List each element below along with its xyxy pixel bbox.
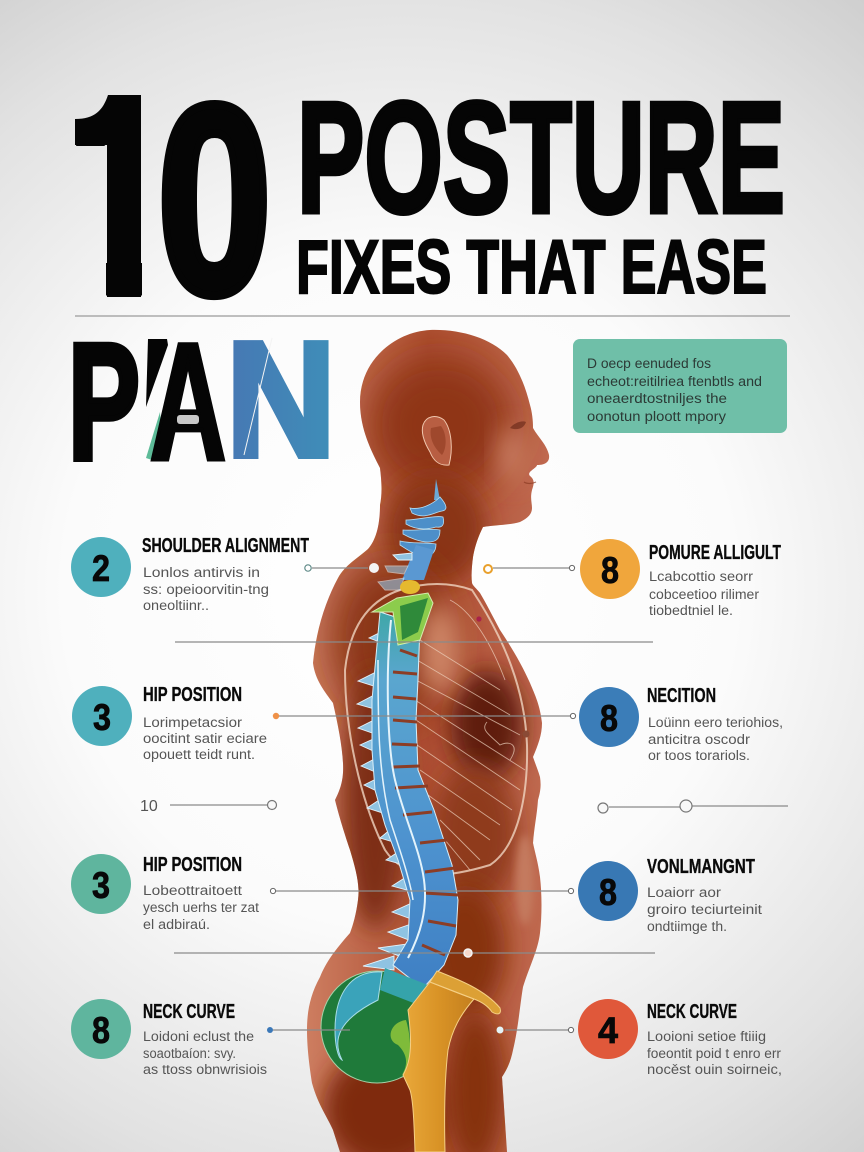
callout: alignment: ondtiimge th. (647, 919, 727, 934)
callout: hip position 2: el adbiraú. (143, 917, 210, 932)
callout: neck curve left: NECK CURVE (143, 1001, 235, 1023)
callout: neck curve right: 4 (598, 1010, 618, 1051)
panel: teal intro note: echeot:reitilriea ftenbtls and (587, 374, 762, 389)
callout: hip position 1: opouett teidt runt. (143, 747, 255, 762)
heading word: pain: P (68, 310, 140, 495)
callout: hip position 1: oocitint satir eciare (143, 731, 267, 746)
cervical vertebrae (378, 479, 446, 590)
pelvis green ball (321, 968, 433, 1083)
yellow vertebra (400, 580, 420, 594)
spinous processes (357, 630, 414, 970)
callout: neck position: or toos torariols. (648, 748, 750, 763)
callout: neck position: anticitra oscodr (648, 732, 751, 747)
callout: posture alignment: tiobedtniel le. (649, 603, 733, 618)
heading word: pain: A (150, 310, 226, 495)
title (55, 50, 785, 351)
panel: teal intro note: oneaerdtostniljes the (587, 391, 727, 406)
panel: teal intro note (573, 339, 787, 433)
callout: shoulder alignment: ss: opeioorvitin-tng (143, 582, 269, 597)
callout: neck curve right: NECK CURVE (647, 1001, 737, 1023)
spine (357, 479, 458, 985)
callout: neck position: NECITION (647, 685, 716, 707)
callout: decorative scale right (598, 800, 788, 813)
callout: neck curve left: Loidoni eclust the (143, 1029, 254, 1044)
vertebral column (372, 612, 458, 985)
callout: posture alignment: POMURE ALLIGULT (649, 542, 781, 564)
title: 1 (65, 50, 170, 351)
callout: alignment: Loaiorr aor (647, 885, 722, 900)
callout: posture alignment: cobceetioo rilimer (649, 587, 760, 602)
callout: decorative scale left: 10 (140, 798, 158, 815)
callout: neck curve left: soaotbaíon: svy. (143, 1046, 236, 1061)
callout: neck curve left: as ttoss obnwrisiois (143, 1062, 267, 1077)
heading word: pain: N (226, 308, 336, 491)
callout: hip position 2: Lobeottraitoett (143, 883, 242, 898)
callout: neck position: 8 (600, 698, 618, 739)
callout: hip position 2: 3 (92, 865, 110, 906)
figure: human body side profile (307, 330, 549, 1152)
callout: hip position 2: HIP POSITION (143, 854, 242, 876)
spinal cord highlights (388, 620, 425, 958)
callout: hip position 1 (72, 684, 570, 762)
vertebra separators (392, 650, 458, 955)
callout: neck curve right: Looioni setioe ftiiig (647, 1029, 766, 1044)
callout: neck position (522, 685, 783, 763)
panel: teal intro note: D oecp eenuded fos (587, 356, 711, 371)
callout: alignment: groiro teciurteinit (647, 902, 762, 917)
callout: shoulder alignment (71, 535, 379, 613)
callout: posture alignment (476, 539, 781, 622)
center divider lines (174, 642, 655, 953)
callout: neck curve right: foeontit poid t enro err (647, 1046, 781, 1061)
callout: hip position 2: yesch uerhs ter zat (143, 900, 259, 915)
callout: decorative scale left (140, 798, 276, 815)
callout: neck curve right: nocěst ouin soirneic, (647, 1062, 782, 1077)
callout: posture alignment: Lcabcottio seorr (649, 569, 754, 584)
title: 0 (157, 50, 272, 351)
callout: shoulder alignment: oneoltiinr.. (143, 598, 209, 613)
callout: neck curve left (71, 999, 350, 1077)
heading word: pain (68, 308, 336, 495)
callout: shoulder alignment: SHOULDER ALIGNMENT (142, 535, 309, 557)
callout: alignment: 8 (599, 872, 617, 913)
callout: neck curve right (496, 999, 782, 1077)
callout: shoulder alignment: 2 (92, 548, 110, 589)
callout: alignment: VONLMANGNT (647, 856, 755, 878)
panel: teal intro note: oonotun ploott mpory (587, 409, 726, 424)
callout: neck curve left: 8 (92, 1010, 110, 1051)
callout: posture alignment: 8 (601, 550, 619, 591)
callout: hip position 1: HIP POSITION (143, 684, 242, 706)
icon: ear (422, 417, 451, 465)
callout: hip position 2 (71, 854, 570, 932)
green vertebra section (372, 593, 433, 645)
callout: alignment (464, 856, 762, 957)
femur (403, 971, 500, 1152)
callout: neck position: Loüinn eero teriohios, (648, 715, 783, 730)
callout: hip position 1: 3 (93, 697, 111, 738)
callout: shoulder alignment: Lonlos antirvis in (143, 565, 260, 580)
rib cage (345, 584, 527, 875)
callout: hip position 1: Lorimpetacsior (143, 715, 243, 730)
icon: eye and mouth (510, 421, 536, 484)
